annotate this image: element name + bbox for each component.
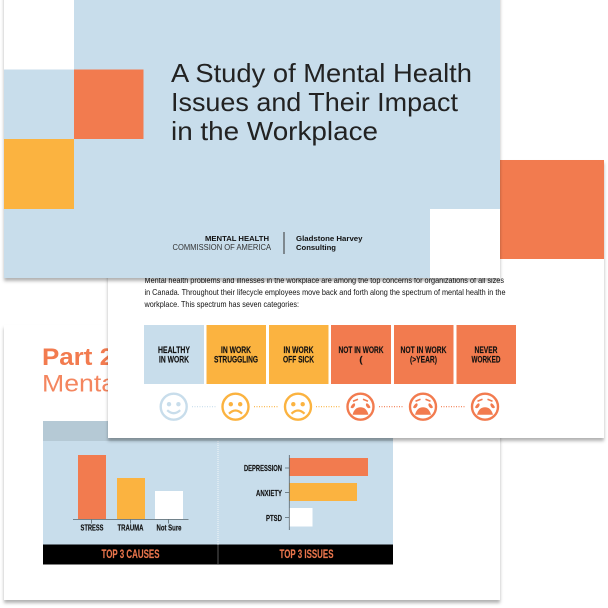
logo: Gladstone Harvey Consulting: Gladstone Harvey [296,234,363,243]
logo: Gladstone Harvey Consulting: Consulting [296,243,336,252]
category: not in work over a year: (>YEAR) [410,354,437,366]
category: healthy in work [144,325,204,384]
logo: Gladstone Harvey Consulting [296,234,363,252]
title: in the Workplace [171,116,378,146]
bar chart: top 3 issues: ANXIETY [256,488,282,498]
category: not in work over a year: NOT IN WORK [400,345,447,356]
category: healthy in work: HEALTHY [158,345,190,356]
intro text: Mental health problems and illnesses in the workplace are among the top concerns for organizations of all sizes [144,275,504,285]
icon: crying face [472,394,498,420]
category: not in work [331,325,391,384]
icon: crying face [410,394,436,420]
category: in work off sick [269,325,328,384]
intro text: in Canada. Throughout their lifecycle employees move back and forth along the spectrum of mental health in the [144,287,506,297]
bar chart: top 3 causes [73,455,188,532]
bar chart: top 3 causes: Not Sure [156,522,182,532]
category: not in work: NOT IN WORK [338,345,384,356]
category: in work struggling: STRUGGLING [214,354,258,366]
intro text [144,275,506,309]
white square bottom right [430,209,500,278]
yellow square [4,139,74,209]
intro text: workplace. This spectrum has seven categories: [144,299,299,309]
icon row: faces and connectors [161,394,498,420]
panel: charts [43,421,393,564]
category: not in work: ( [359,354,363,366]
bar chart: top 3 issues [244,455,368,530]
orange corner block [500,160,604,259]
title: A Study of Mental Health [171,58,472,88]
caption: top 3 causes: TOP 3 CAUSES [102,549,160,561]
logo: Mental Health Commission of America: MENTAL HEALTH [205,234,269,243]
icon: smiling face [161,394,187,420]
caption: top 3 issues: TOP 3 ISSUES [280,549,334,561]
icon: sad face [222,394,248,420]
bar chart: top 3 causes: STRESS [80,522,104,532]
category: never worked [456,325,516,384]
category: in work struggling: IN WORK [221,345,251,356]
icon: sad face [285,394,311,420]
subheading: Mental: Mental [42,370,122,398]
category: healthy in work: IN WORK [159,354,189,366]
bar chart: top 3 causes: TRAUMA [118,522,144,532]
category: in work off sick: OFF SICK [283,354,314,366]
bar chart: top 3 issues: PTSD [266,513,282,523]
title [171,58,472,146]
category: never worked: NEVER [474,345,498,356]
panel: front cover [4,0,500,278]
logo: Mental Health Commission of America: COMMISSION OF AMERICA [172,243,272,252]
icon: crying face [348,394,374,420]
panel: back page, Part 2 causes and issues [4,325,500,600]
category: not in work over a year [394,325,454,384]
title: Issues and Their Impact [171,87,459,117]
logo divider [284,232,285,254]
category: never worked: WORKED [472,354,501,366]
category: in work off sick: IN WORK [284,345,314,356]
category: in work struggling [206,325,266,384]
heading: Part 2: Part 2 [42,344,114,371]
logo: Mental Health Commission of America [172,234,272,252]
bar chart: top 3 issues: DEPRESSION [244,463,282,473]
orange square [74,70,144,139]
panel: middle page, spectrum of mental health [108,160,604,438]
white square top left [4,0,74,70]
